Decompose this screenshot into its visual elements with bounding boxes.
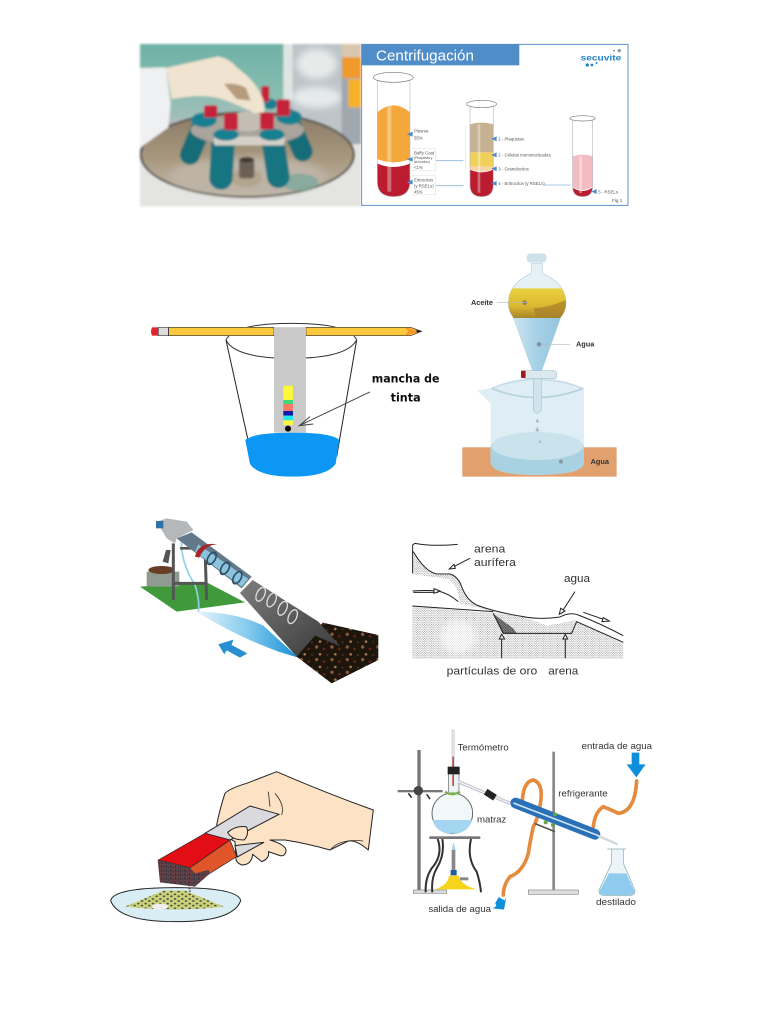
receiving flask bbox=[599, 849, 635, 896]
thermometer bbox=[452, 730, 454, 785]
beaker bbox=[477, 377, 584, 475]
labels: refrigerante bbox=[558, 788, 608, 798]
rock bed bbox=[297, 623, 378, 683]
riverbed stipple bbox=[412, 606, 623, 658]
second stand bbox=[528, 752, 578, 894]
labels: salida de agua bbox=[428, 904, 491, 914]
labels: Aceite, Agua: Aceite bbox=[471, 298, 493, 307]
sand deposit bbox=[492, 612, 577, 633]
arms bbox=[190, 119, 303, 178]
label: mancha de tinta with arrow: mancha de bbox=[372, 372, 440, 386]
labels: arena bbox=[474, 543, 506, 555]
fraction labels: (Plaquetas y bbox=[414, 156, 433, 160]
labels: arena bbox=[548, 666, 579, 678]
diagram: gold panning river section bbox=[412, 543, 623, 678]
lab coat bbox=[140, 67, 171, 148]
labels: matraz bbox=[477, 814, 507, 824]
pencil bbox=[151, 327, 422, 336]
fraction labels: (y RSELs) bbox=[414, 183, 434, 188]
fraction labels: leucocitos) bbox=[414, 160, 430, 164]
pigment bands bbox=[283, 386, 293, 432]
stand and box bbox=[147, 543, 208, 600]
screw tube bbox=[156, 518, 252, 588]
labels: Aceite, Agua bbox=[471, 298, 610, 466]
pointer arrows bbox=[434, 558, 609, 658]
fraction labels: 4 - Eritrocitos (y RSELs) bbox=[498, 181, 545, 186]
label: mancha de tinta with arrow bbox=[299, 372, 440, 426]
funnel bbox=[497, 253, 570, 443]
hand bbox=[217, 772, 373, 865]
fraction labels: 55% bbox=[414, 136, 423, 141]
water hoses bbox=[503, 780, 637, 895]
diagram: separating funnel bbox=[462, 253, 617, 477]
fraction labels: Buffy Coat bbox=[414, 150, 435, 155]
labels: aurífera bbox=[474, 557, 517, 569]
image: centrifuge photo and blood fractionation diagram bbox=[140, 44, 628, 206]
arrow: water outlet bbox=[492, 896, 508, 911]
fraction labels: Fig 1 bbox=[612, 198, 623, 203]
condenser bbox=[510, 802, 618, 844]
labels: agua bbox=[564, 573, 591, 585]
paper strip bbox=[274, 327, 306, 433]
diagram: paper chromatography bbox=[151, 253, 617, 477]
table bbox=[462, 447, 617, 477]
contour lines bbox=[412, 543, 623, 642]
dark trough bbox=[240, 580, 341, 657]
left stand with clamp bbox=[398, 750, 447, 893]
test tube 3 bbox=[570, 116, 595, 197]
arrow: water inlet bbox=[627, 753, 646, 777]
fraction labels: 5 - RSELs bbox=[598, 189, 618, 194]
test tube 1 bbox=[373, 72, 413, 197]
fraction labels: 2 - Células mononucleadas bbox=[498, 152, 551, 157]
photo: hand loading a centrifuge bbox=[140, 44, 361, 206]
logo: secuvite bbox=[581, 49, 622, 67]
labels: partículas de oro bbox=[447, 666, 537, 678]
tripod and burner bbox=[426, 836, 481, 892]
glass and water bbox=[226, 323, 357, 477]
fraction labels: 45% bbox=[414, 190, 423, 195]
dish bbox=[111, 888, 241, 922]
blue arrow bbox=[218, 640, 247, 658]
labels: Termómetro bbox=[458, 743, 509, 753]
rotor bbox=[191, 115, 304, 145]
header: Centrifugación: Centrifugación bbox=[376, 48, 474, 64]
flask bbox=[432, 767, 510, 834]
labels bbox=[428, 741, 652, 914]
magnet bbox=[158, 806, 279, 892]
test tube 2 bbox=[467, 100, 497, 197]
labels: Aceite, Agua: Agua bbox=[591, 457, 610, 466]
fraction labels: <1% bbox=[414, 165, 423, 170]
body bbox=[140, 144, 361, 206]
fraction labels: 1 - Plaquetas bbox=[498, 136, 524, 141]
fraction labels: Eritrocitos bbox=[414, 177, 433, 182]
panel: centrifugation diagram bbox=[361, 44, 628, 206]
diagram: distillation apparatus bbox=[398, 730, 652, 914]
labels: entrada de agua bbox=[582, 741, 652, 751]
fraction labels: Plasma bbox=[414, 129, 429, 134]
fraction labels: 3 - Granulocitos bbox=[498, 166, 529, 171]
water stream bbox=[181, 538, 298, 658]
logo: secuvite: secuvite bbox=[581, 53, 622, 62]
labels: Aceite, Agua: Agua bbox=[576, 340, 595, 349]
diagram: magnetic separation bbox=[111, 772, 373, 922]
labels bbox=[447, 543, 591, 678]
label: mancha de tinta with arrow: tinta bbox=[391, 391, 421, 405]
fraction labels bbox=[407, 126, 623, 203]
labels: destilado bbox=[596, 897, 636, 907]
grass platform bbox=[140, 582, 245, 612]
upper bank of auriferous sand bbox=[413, 552, 492, 611]
glove bbox=[166, 56, 265, 113]
header: Centrifugación bbox=[362, 44, 519, 65]
diagram: Archimedes screw bbox=[140, 518, 378, 683]
